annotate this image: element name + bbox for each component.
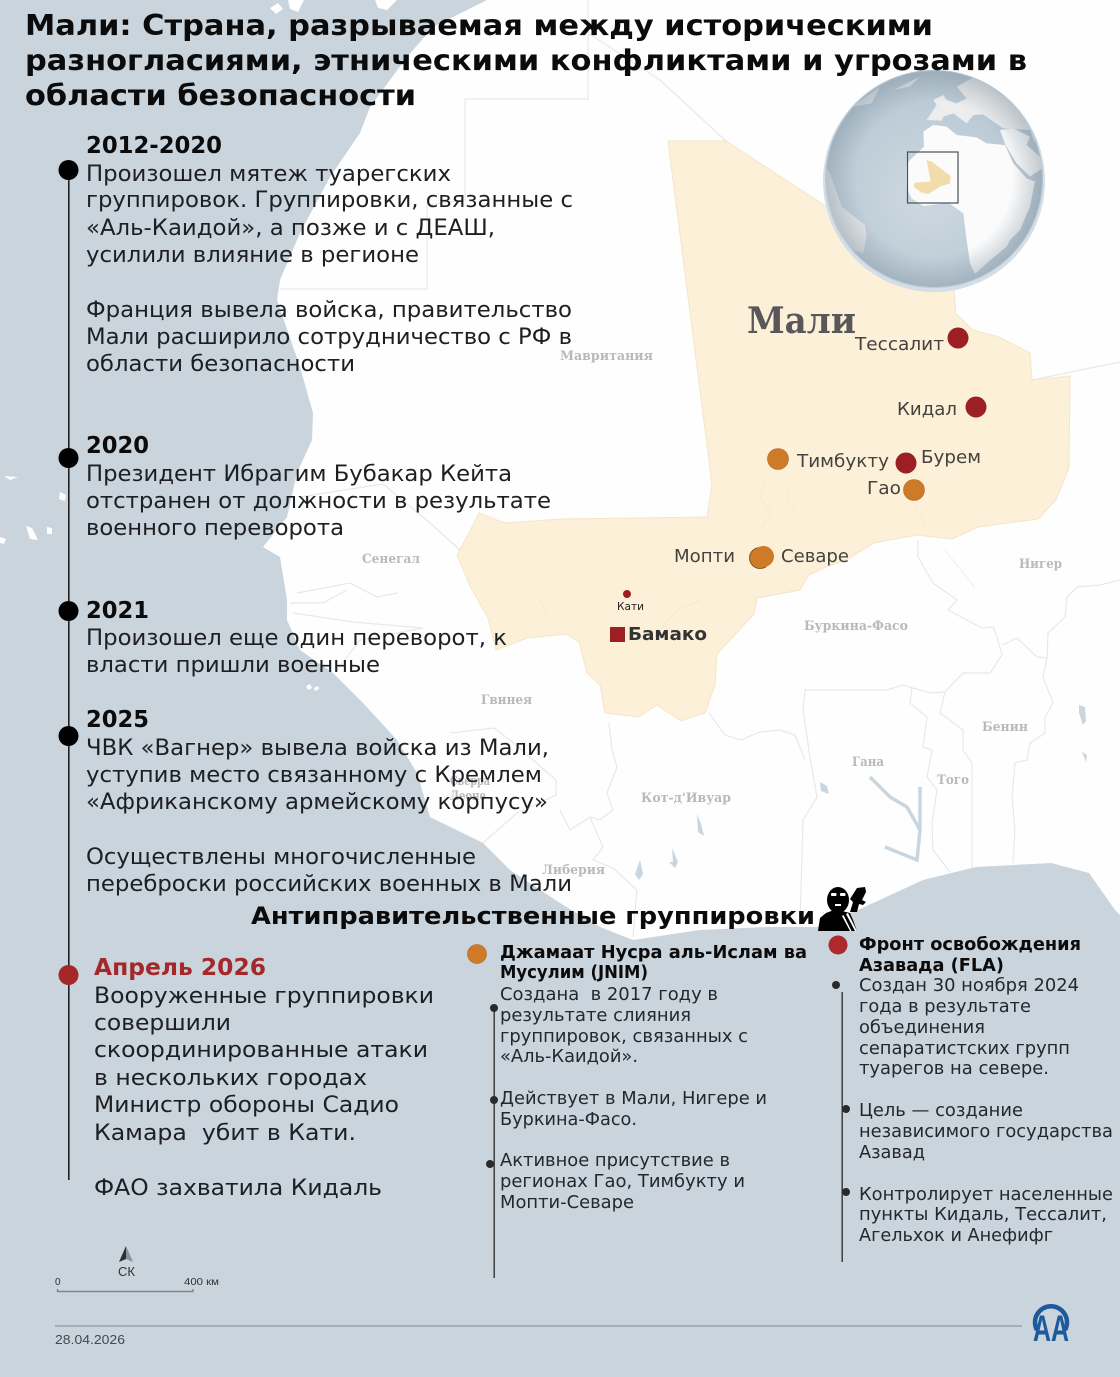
event 2012-2020: группировок. Группировки, связанные с xyxy=(86,187,573,213)
event April 2026: Апрель 2026 xyxy=(94,955,266,981)
panel: FLA: объединения xyxy=(859,1017,985,1038)
event April 2026: Министр обороны Садио xyxy=(94,1092,399,1118)
panel: JNIM: группировок, связанных с xyxy=(500,1026,748,1047)
panel: FLA xyxy=(828,934,1113,1262)
country labels: Того xyxy=(937,773,969,788)
panel: FLA: независимого государства xyxy=(859,1121,1113,1142)
panel: FLA: туарегов на севере. xyxy=(859,1058,1049,1079)
logo: AA xyxy=(1033,1306,1069,1349)
footer rule xyxy=(55,1326,1022,1327)
event 2012-2020: усилили влияние в регионе xyxy=(86,242,419,268)
event 2012-2020: области безопасности xyxy=(86,351,355,377)
map: land xyxy=(0,0,1120,940)
event 2020: военного переворота xyxy=(86,515,344,541)
event 2012-2020 xyxy=(58,133,573,377)
event 2012-2020: «Аль-Каидой», а позже и с ДЕАШ, xyxy=(86,215,495,241)
city markers and labels xyxy=(610,328,986,645)
country labels: Сьерра xyxy=(450,774,490,789)
event 2021: власти пришли военные xyxy=(86,652,380,678)
panel: FLA: Агельхок и Анефифг xyxy=(859,1225,1053,1246)
event 2020 xyxy=(58,433,551,541)
city markers and labels: Кидал xyxy=(897,399,957,420)
date: 28.04.2026 xyxy=(55,1332,125,1347)
event April 2026 xyxy=(58,955,434,1201)
panel: JNIM: Мопти-Севаре xyxy=(500,1192,634,1213)
city markers and labels: Тессалит xyxy=(854,334,944,355)
country labels: Сенегал xyxy=(362,552,420,567)
locator box with Mali xyxy=(908,152,958,203)
panel: JNIM: регионах Гао, Тимбукту и xyxy=(500,1171,745,1192)
event 2020: отстранен от должности в результате xyxy=(86,488,551,514)
event 2021: 2021 xyxy=(86,598,149,624)
city markers and labels: Севаре xyxy=(781,546,849,567)
map label: Mali: Мали xyxy=(747,300,856,342)
event 2025: Осуществлены многочисленные xyxy=(86,844,476,870)
city markers and labels: Бурем xyxy=(921,447,981,468)
city markers and labels: Мопти xyxy=(674,546,735,567)
country labels: Либерия xyxy=(542,863,605,878)
timeline axis xyxy=(68,170,70,1180)
event April 2026: Камара убит в Кати. xyxy=(94,1120,356,1146)
heading: anti-government groups: Антиправительственные группировки xyxy=(251,902,815,930)
event 2025: переброски российских военных в Мали xyxy=(86,871,572,897)
event April 2026: скоординированные атаки xyxy=(94,1037,428,1063)
event 2025: «Африканскому армейскому корпусу» xyxy=(86,789,548,815)
title: разногласиями, этническими конфликтами и угрозами в xyxy=(25,44,1027,77)
map: neighbouring borders xyxy=(280,0,1120,937)
event 2025: 2025 xyxy=(86,707,149,733)
panel: JNIM: Мусулим (JNIM) xyxy=(500,962,648,983)
scale bar xyxy=(55,1277,219,1292)
panel: JNIM: Буркина-Фасо. xyxy=(500,1109,637,1130)
event 2021 xyxy=(58,598,507,678)
panel: JNIM: результате слияния xyxy=(500,1005,691,1026)
panel: JNIM: «Аль-Каидой». xyxy=(500,1046,638,1067)
country labels: Гвинея xyxy=(481,693,532,708)
event 2012-2020: Мали расширило сотрудничество с РФ в xyxy=(86,324,572,350)
country labels: Нигер xyxy=(1019,557,1062,572)
panel: FLA: сепаратистских групп xyxy=(859,1038,1070,1059)
title: области безопасности xyxy=(25,79,416,112)
country labels: Гана xyxy=(852,755,885,770)
city markers and labels: Тимбукту xyxy=(796,451,889,472)
event 2012-2020: 2012-2020 xyxy=(86,133,222,159)
map: country Mali shape xyxy=(457,141,1070,721)
panel: FLA: Азавада (FLA) xyxy=(859,955,1004,976)
panel: FLA: Создан 30 ноября 2024 xyxy=(859,975,1079,996)
globe locator xyxy=(823,70,1047,292)
icon: north arrow xyxy=(118,1246,135,1279)
icon: north arrow: СК xyxy=(118,1264,135,1279)
event 2025 xyxy=(58,707,572,897)
panel: FLA: Контролирует населенные xyxy=(859,1184,1113,1205)
event April 2026: в нескольких городах xyxy=(94,1065,367,1091)
event 2025: уступив место связанному с Кремлем xyxy=(86,762,542,788)
event April 2026: ФАО захватила Кидаль xyxy=(94,1175,382,1201)
icon: armed militant xyxy=(818,887,866,931)
city markers and labels: Бамако xyxy=(628,624,707,645)
panel: JNIM: Действует в Мали, Нигере и xyxy=(500,1088,767,1109)
logo: AA: AA xyxy=(1033,1308,1069,1349)
country labels xyxy=(362,349,1062,878)
panel: JNIM: Активное присутствие в xyxy=(500,1150,730,1171)
panel: JNIM xyxy=(468,942,807,1278)
city markers and labels: Гао xyxy=(867,478,901,499)
event 2020: Президент Ибрагим Бубакар Кейта xyxy=(86,461,512,487)
scale bar: 0 xyxy=(55,1277,61,1288)
panel: JNIM: Создана в 2017 году в xyxy=(500,984,718,1005)
event 2012-2020: Произошел мятеж туарегских xyxy=(86,161,451,187)
country labels: Бенин xyxy=(982,720,1028,735)
event 2021: Произошел еще один переворот, к xyxy=(86,625,507,651)
timeline xyxy=(58,133,573,1201)
country labels: Леоне xyxy=(450,789,486,804)
map: lakes and rivers xyxy=(635,550,1087,880)
map: inner rivers xyxy=(540,480,927,642)
event 2012-2020: Франция вывела войска, правительство xyxy=(86,297,572,323)
panel: FLA: Фронт освобождения xyxy=(859,934,1081,955)
event 2025: ЧВК «Вагнер» вывела войска из Мали, xyxy=(86,735,549,761)
country labels: Буркина-Фасо xyxy=(804,619,908,634)
country labels: Мавритания xyxy=(560,349,653,364)
title: Мали: Страна, разрываемая между историческими xyxy=(25,9,933,42)
title xyxy=(25,9,1027,112)
city markers and labels: Кати xyxy=(617,600,644,613)
panel: FLA: года в результате xyxy=(859,996,1031,1017)
panel: JNIM: Джамаат Нусра аль-Ислам ва xyxy=(500,942,807,963)
panel: FLA: пункты Кидаль, Тессалит, xyxy=(859,1204,1107,1225)
event 2020: 2020 xyxy=(86,433,149,459)
event April 2026: совершили xyxy=(94,1010,231,1036)
event April 2026: Вооруженные группировки xyxy=(94,983,434,1009)
scale bar: 400 км xyxy=(184,1277,219,1288)
panel: FLA: Цель — создание xyxy=(859,1100,1023,1121)
country labels: Кот-д'Ивуар xyxy=(641,791,731,806)
panel: FLA: Азавад xyxy=(859,1142,925,1163)
